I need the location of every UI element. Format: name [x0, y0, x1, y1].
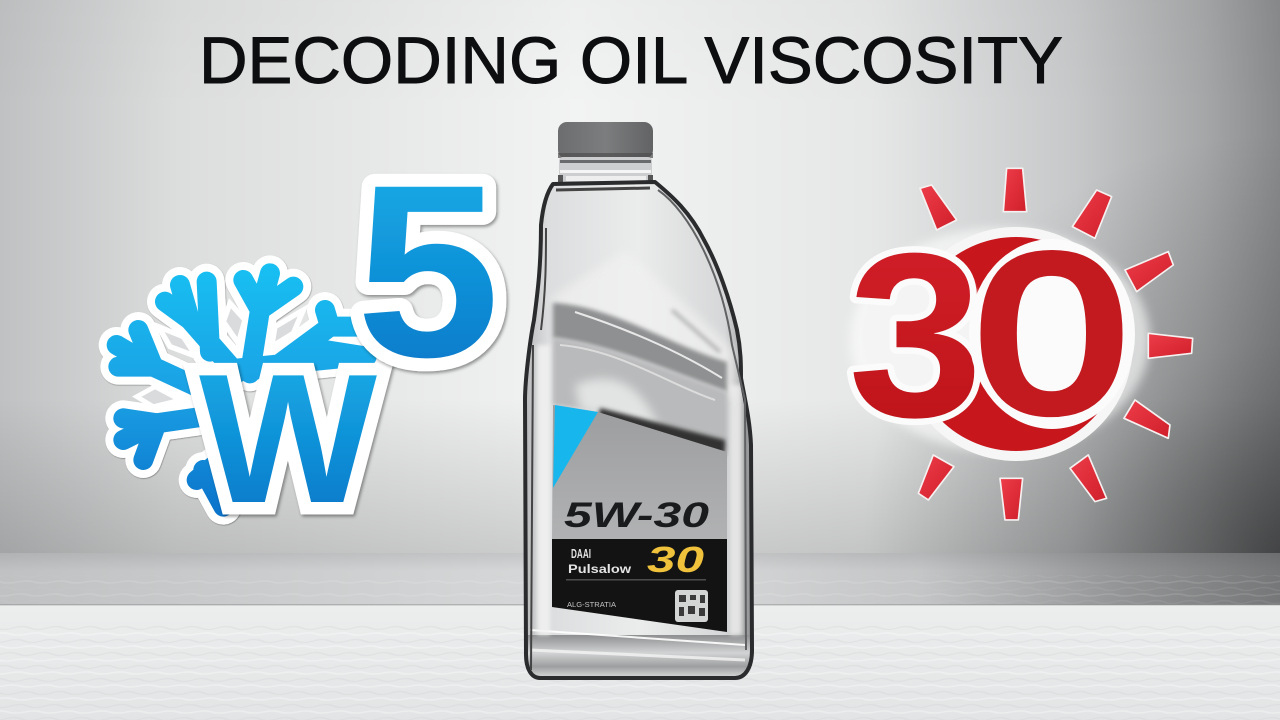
label black panel	[552, 539, 727, 632]
white backing of 0	[969, 239, 1135, 429]
tiled floor	[0, 604, 1280, 720]
label blue triangle	[553, 405, 598, 488]
icon: snowflake	[117, 273, 367, 507]
sun disc	[904, 232, 1128, 456]
numeral 3: 3	[848, 204, 983, 466]
label grade text: 5W-30	[564, 496, 710, 535]
label gold 30: 30	[647, 539, 704, 580]
label grey panel	[552, 405, 727, 540]
icon: snowflake with W and 5	[117, 134, 500, 541]
bottle cap	[558, 122, 653, 183]
icon: sun with 30	[848, 168, 1193, 520]
sun glow	[850, 228, 1150, 452]
background band behind floor	[0, 553, 1280, 605]
label small subheading: Pulsalow	[568, 562, 632, 576]
label small heading: DAAI	[571, 546, 591, 561]
label fine print: ALG-STRATIA	[567, 602, 616, 609]
icon: oil bottle	[525, 122, 752, 680]
bottle label	[552, 405, 727, 632]
title: DECODING OIL VISCOSITY	[199, 23, 1063, 97]
letter W: W	[199, 335, 377, 541]
sun rays	[918, 168, 1193, 520]
white backing of 3	[863, 257, 987, 413]
background wall	[0, 0, 1280, 553]
numeral 5: 5	[356, 134, 500, 409]
numeral 0: 0	[976, 210, 1127, 458]
label QR code	[675, 590, 708, 622]
bottle body	[525, 182, 752, 680]
